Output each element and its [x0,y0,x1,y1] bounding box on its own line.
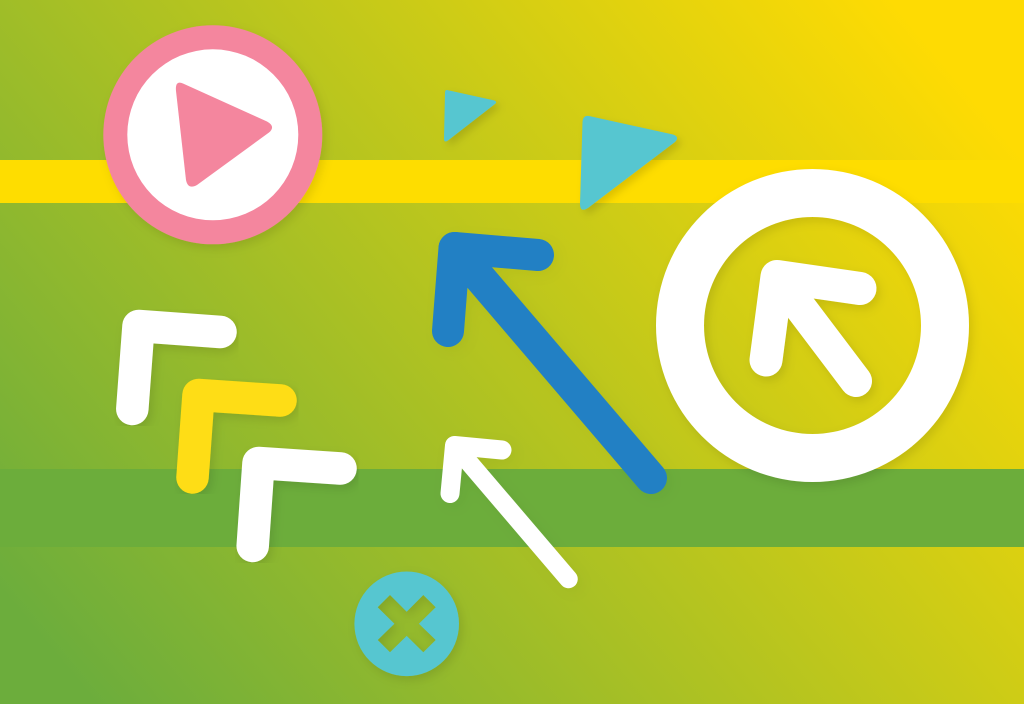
arrow: large blue [448,248,651,478]
icon: small teal triangle [444,90,496,141]
icon: teal close button [354,571,459,676]
chevron: white top [132,326,220,409]
icon: large white ring with arrow [656,169,969,482]
green band [0,469,1024,547]
icon: play button circle [103,25,322,244]
chevron: white bottom [253,463,340,546]
icon: large teal triangle [580,116,677,210]
chevron: yellow [192,395,280,478]
arrow: small white [450,446,568,579]
yellow band [0,160,1024,203]
